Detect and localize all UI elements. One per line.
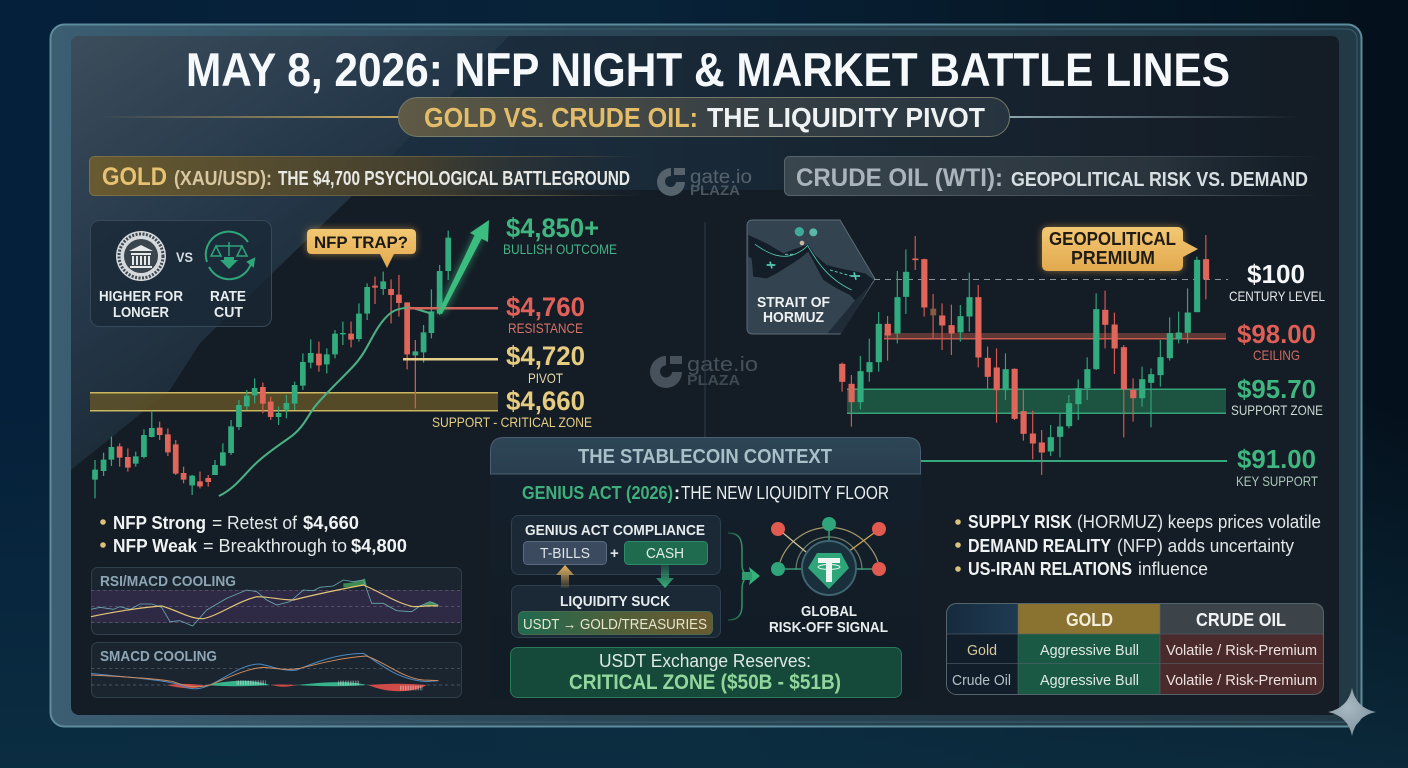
label: higher for longer: LONGER: [113, 304, 169, 321]
title: MAY 8, 2026: NFP NIGHT & MARKET BATTLE LINES: [186, 43, 1230, 96]
gold scenario bullets: = Retest of: [212, 513, 298, 533]
support zone 95.70: [1231, 374, 1323, 418]
gold scenario bullets: = Breakthrough to: [203, 536, 347, 556]
liquidity suck box: USDT → GOLD/TREASURIES: [523, 616, 707, 633]
panel: RSI/MACD indicator: [91, 568, 462, 634]
icon: federal reserve seal: [116, 231, 166, 281]
gold scenario bullets: [100, 513, 407, 556]
panel: fed vs rate cut: [90, 220, 272, 326]
oil risk bullets: SUPPLY RISK: [968, 512, 1072, 532]
usdt reserves callout: [510, 648, 902, 698]
watermark: gate.io top: gate.io: [690, 167, 752, 188]
resistance line: [408, 307, 498, 310]
stablecoin header: THE STABLECOIN CONTEXT: [578, 446, 832, 468]
comparison table: Crude Oil: [952, 672, 1011, 689]
oil risk bullets: [955, 512, 1321, 579]
usdt reserves callout: CRITICAL ZONE ($50B - $51B): [569, 671, 841, 694]
gold section heading: GOLD: [102, 163, 167, 191]
label: global risk-off signal: GLOBAL: [801, 603, 857, 620]
ceiling band: [884, 333, 1226, 340]
compliance box: T-BILLS: [540, 545, 590, 562]
comparison table: CRUDE OIL: [1196, 610, 1286, 630]
resistance 4760: RESISTANCE: [508, 320, 583, 336]
bullish arrow: [438, 220, 489, 314]
arrow: down from cash: [656, 565, 674, 588]
target 4850: $4,850+: [506, 213, 599, 243]
oil price labels: [1229, 259, 1325, 489]
panel: strait of hormuz map: STRAIT OF: [757, 294, 830, 311]
support zone 95.70: SUPPORT ZONE: [1231, 402, 1323, 418]
comparison table: Aggressive Bull: [1040, 672, 1139, 689]
arrow: up to t-bills: [556, 565, 574, 588]
ceiling 98: [1237, 319, 1316, 363]
compliance box: CASH: [646, 545, 684, 562]
label: rate cut: RATE: [210, 288, 246, 305]
icon: sparkle: [1328, 688, 1376, 736]
panel: RSI/MACD indicator: RSI/MACD COOLING: [100, 573, 236, 590]
gold section heading: [90, 156, 642, 196]
target 4850: [503, 213, 617, 257]
century level 100: CENTURY LEVEL: [1229, 288, 1325, 304]
panel: SMACD indicator: SMACD COOLING: [100, 648, 217, 665]
liquidity suck box: [512, 586, 720, 638]
support 4660: [432, 386, 592, 430]
comparison table: [946, 603, 1324, 695]
key support 91: [1236, 444, 1318, 489]
oil risk bullets: (NFP) adds uncertainty: [1117, 536, 1294, 556]
century level 100: [1229, 259, 1325, 304]
compliance box: [512, 516, 720, 574]
crude oil section heading: GEOPOLITICAL RISK VS. DEMAND: [1011, 169, 1308, 191]
oil risk bullets: (HORMUZ) keeps prices volatile: [1077, 512, 1321, 532]
subtitle pill: GOLD VS. CRUDE OIL:: [424, 102, 698, 133]
pivot line: [403, 358, 498, 360]
comparison table: Volatile / Risk-Premium: [1166, 642, 1317, 659]
liquidity suck box: LIQUIDITY SUCK: [560, 593, 670, 610]
watermark: gate.io top: [657, 167, 752, 198]
comparison table: Aggressive Bull: [1040, 642, 1139, 659]
oil risk bullets: DEMAND REALITY: [968, 536, 1111, 556]
gold candlestick chart: [90, 220, 498, 498]
support zone band: [847, 388, 1226, 414]
subtitle pill: THE LIQUIDITY PIVOT: [707, 102, 985, 133]
gold candles: [92, 231, 451, 498]
panel: SMACD indicator: [91, 642, 462, 698]
main dark panel: [71, 36, 1339, 715]
resistance 4760: [506, 292, 585, 336]
panel: strait of hormuz map: [747, 220, 875, 334]
support zone 95.70: $95.70: [1237, 374, 1316, 404]
comparison table: Volatile / Risk-Premium: [1166, 672, 1317, 689]
ceiling 98: CEILING: [1253, 347, 1300, 363]
genius act subtitle: [522, 483, 889, 503]
compliance box: +: [610, 545, 619, 562]
bracket arrow: [728, 533, 760, 620]
watermark: gate.io top: PLAZA: [690, 183, 740, 198]
target 4850: BULLISH OUTCOME: [503, 241, 617, 257]
watermark: gate.io center: gate.io: [687, 354, 758, 376]
pivot 4720: PIVOT: [528, 370, 563, 386]
callout: NFP trap: NFP TRAP?: [314, 233, 408, 252]
label: global risk-off signal: RISK-OFF SIGNAL: [769, 619, 888, 636]
oil risk bullets: influence: [1138, 559, 1208, 579]
ceiling 98: $98.00: [1237, 319, 1316, 349]
callout: NFP trap: [307, 229, 416, 268]
key support line: [921, 460, 1227, 462]
gold price labels: [432, 213, 617, 430]
pivot 4720: [506, 341, 585, 386]
oil risk bullets: US-IRAN RELATIONS: [968, 559, 1132, 579]
genius act subtitle: THE NEW LIQUIDITY FLOOR: [681, 483, 889, 503]
support 4660: SUPPORT - CRITICAL ZONE: [432, 414, 592, 430]
moving average curve: [219, 307, 431, 496]
callout: geopolitical premium: GEOPOLITICAL: [1049, 229, 1176, 249]
label: rate cut: CUT: [214, 304, 243, 321]
century level 100: $100: [1247, 259, 1305, 289]
crude oil candlestick chart: [839, 235, 1228, 475]
gold scenario bullets: NFP Strong: [113, 513, 206, 533]
pivot 4720: $4,720: [506, 341, 585, 371]
gold scenario bullets: $4,660: [303, 513, 359, 533]
stablecoin header: [490, 438, 920, 474]
crude oil section heading: CRUDE OIL (WTI):: [796, 164, 1003, 192]
gold scenario bullets: NFP Weak: [113, 536, 198, 556]
gold section heading: (XAU/USD):: [174, 168, 272, 190]
resistance 4760: $4,760: [506, 292, 585, 322]
label: higher for longer: HIGHER FOR: [99, 288, 183, 305]
crude oil section heading: [784, 156, 1320, 196]
gold section heading: THE $4,700 PSYCHOLOGICAL BATTLEGROUND: [278, 168, 630, 190]
watermark: gate.io center: PLAZA: [687, 372, 740, 389]
support 4660: $4,660: [506, 386, 585, 416]
usdt reserves callout: USDT Exchange Reserves:: [599, 651, 811, 671]
center divider: [704, 222, 706, 437]
compliance box: GENIUS ACT COMPLIANCE: [525, 522, 705, 539]
oil candles: [839, 235, 1209, 475]
comparison table: Gold: [967, 642, 997, 659]
century dashed line: [874, 278, 1228, 280]
key support 91: KEY SUPPORT: [1236, 473, 1318, 489]
vs: VS: [176, 249, 193, 265]
watermark: gate.io center: [650, 354, 758, 389]
comparison table: GOLD: [1066, 610, 1113, 630]
panel: strait of hormuz map: HORMUZ: [763, 309, 824, 326]
subtitle pill: [100, 98, 1300, 136]
callout: geopolitical premium: [1042, 227, 1198, 271]
icon: scales with rotating arrows: [206, 232, 254, 279]
icon: tether network: [771, 517, 886, 595]
genius act subtitle: GENIUS ACT (2026): [522, 483, 673, 503]
panel: the stablecoin context: [490, 437, 921, 700]
genius act subtitle: :: [674, 483, 680, 503]
gold scenario bullets: $4,800: [351, 536, 407, 556]
support zone band: [90, 392, 498, 412]
callout: geopolitical premium: PREMIUM: [1071, 248, 1155, 268]
key support 91: $91.00: [1237, 444, 1316, 474]
